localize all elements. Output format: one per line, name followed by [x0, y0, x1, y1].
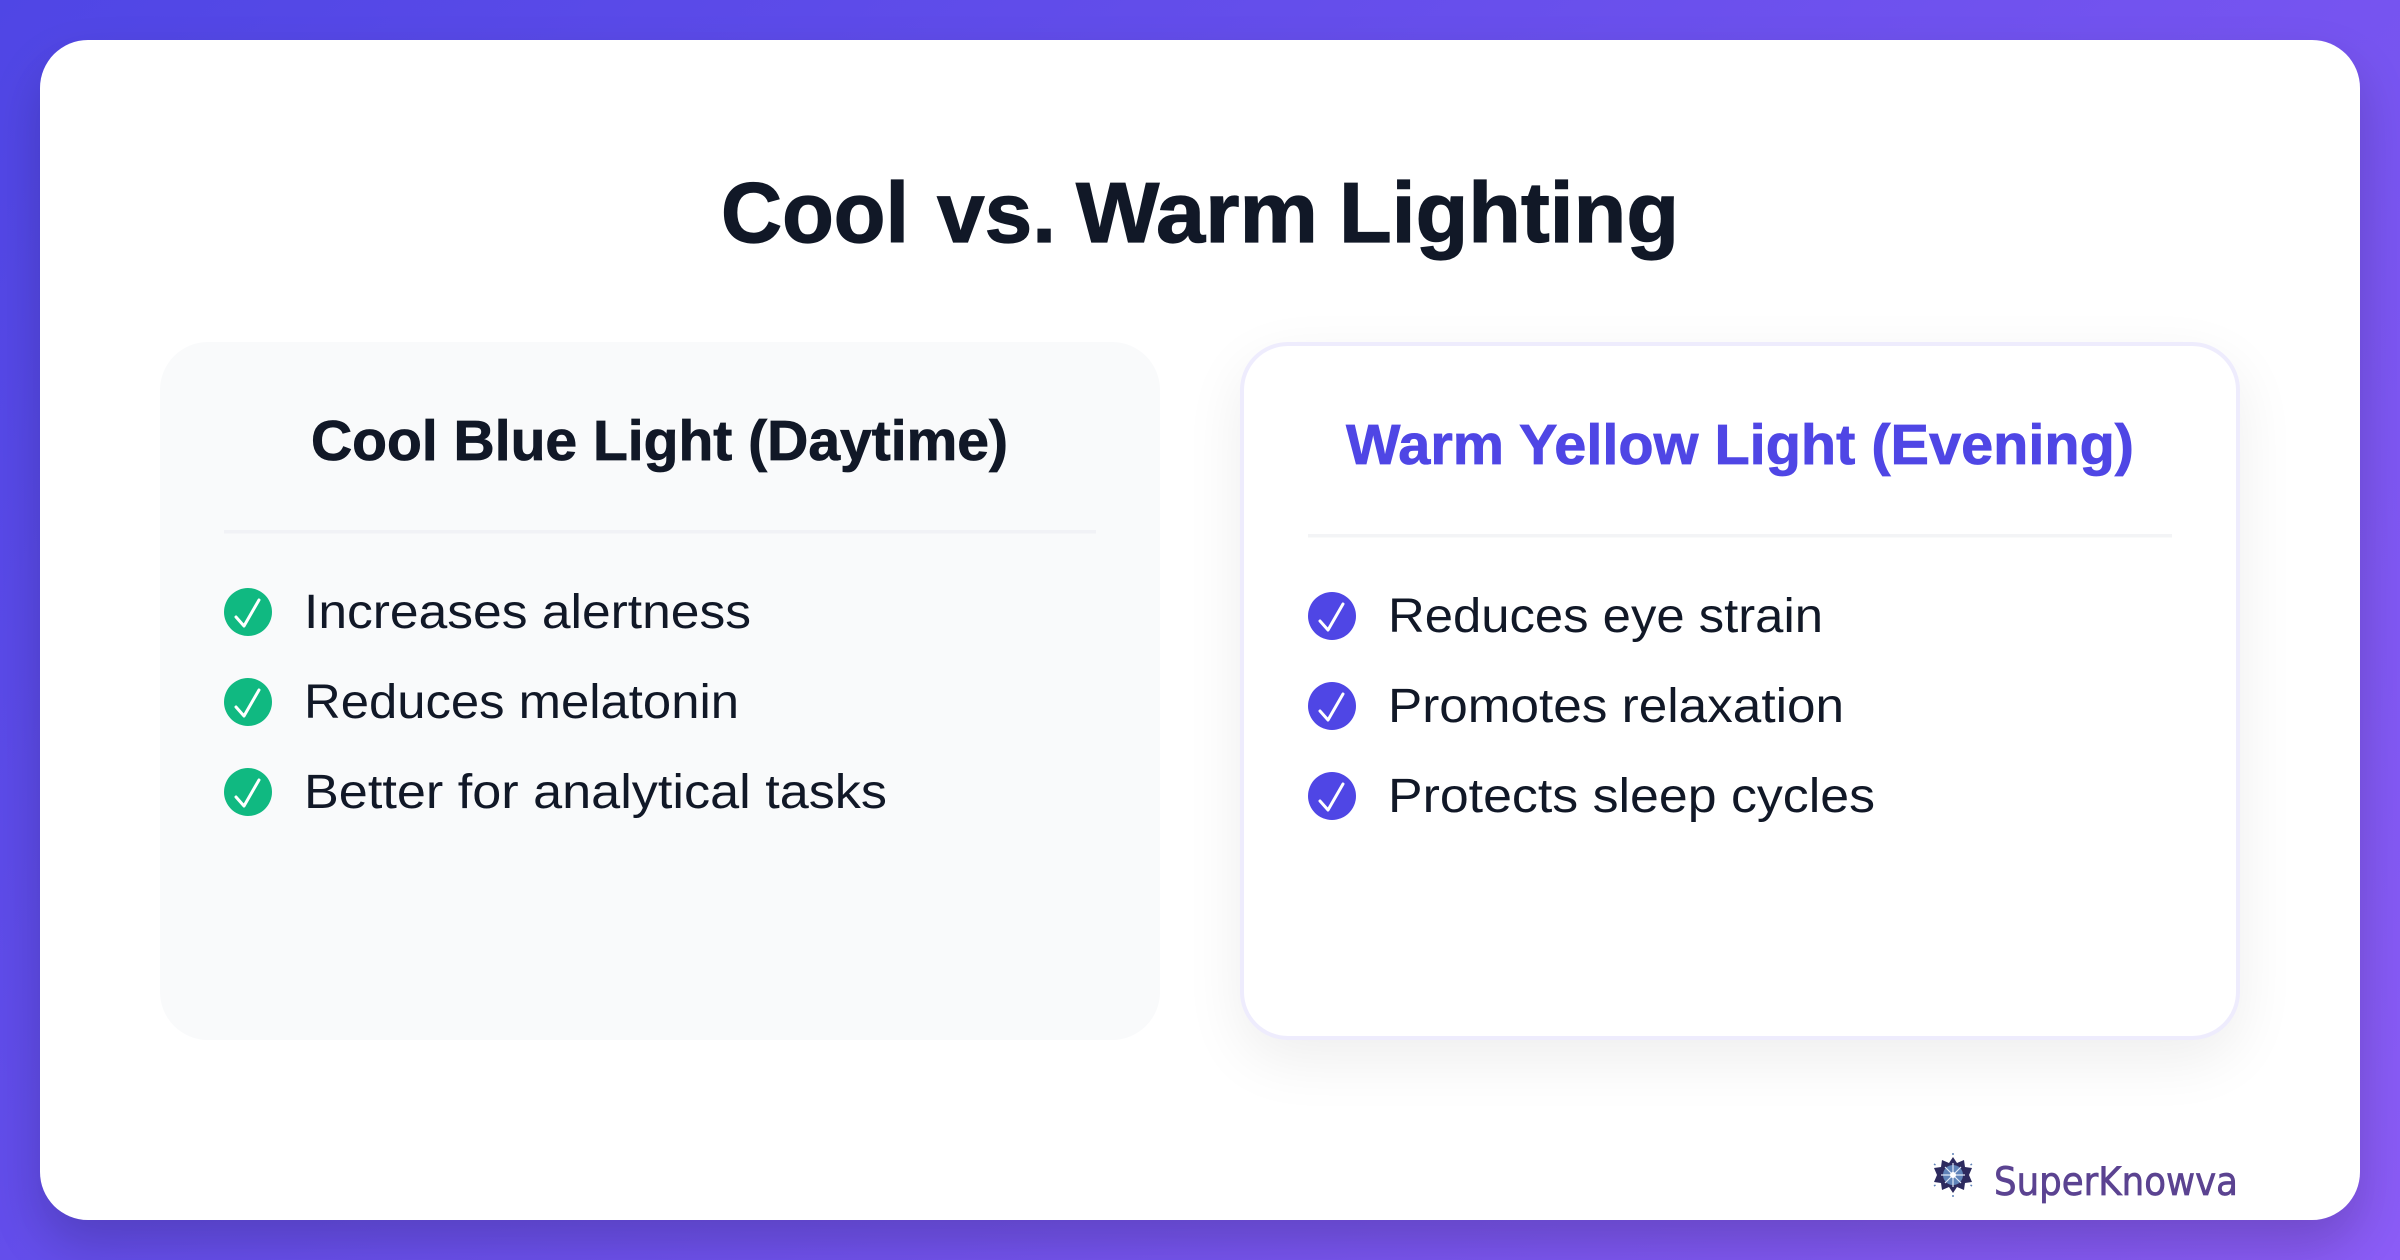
title: Warm — [1076, 166, 1318, 261]
title: vs. — [937, 166, 1056, 261]
icon: starburst — [1934, 1153, 1972, 1197]
title: Lighting — [1339, 166, 1679, 261]
panel: warm yellow light background — [1240, 342, 2240, 1040]
heading: cool blue light: Cool Blue Light (Daytime) — [311, 409, 1008, 473]
list item: increases alertness: Increases alertness — [304, 586, 751, 639]
logo: SuperKnowva — [1934, 1153, 2238, 1205]
list item: reduces melatonin: Reduces melatonin — [304, 676, 739, 729]
logo wordmark: SuperKnowva — [1994, 1160, 2238, 1205]
list item: reduces eye strain: Reduces eye strain — [1388, 590, 1823, 643]
heading: warm yellow light: Warm Yellow Light (Evening) — [1346, 413, 2134, 477]
panel content: cool blue light — [224, 409, 1096, 819]
list item: better for analytical tasks: Better for analytical tasks — [304, 766, 887, 819]
list item: protects sleep cycles: Protects sleep cycles — [1388, 770, 1875, 823]
panel content: warm yellow light — [1308, 413, 2172, 823]
list item: promotes relaxation: Promotes relaxation — [1388, 680, 1844, 733]
title: Cool — [721, 166, 909, 261]
panel: cool blue light background — [160, 342, 1160, 1040]
